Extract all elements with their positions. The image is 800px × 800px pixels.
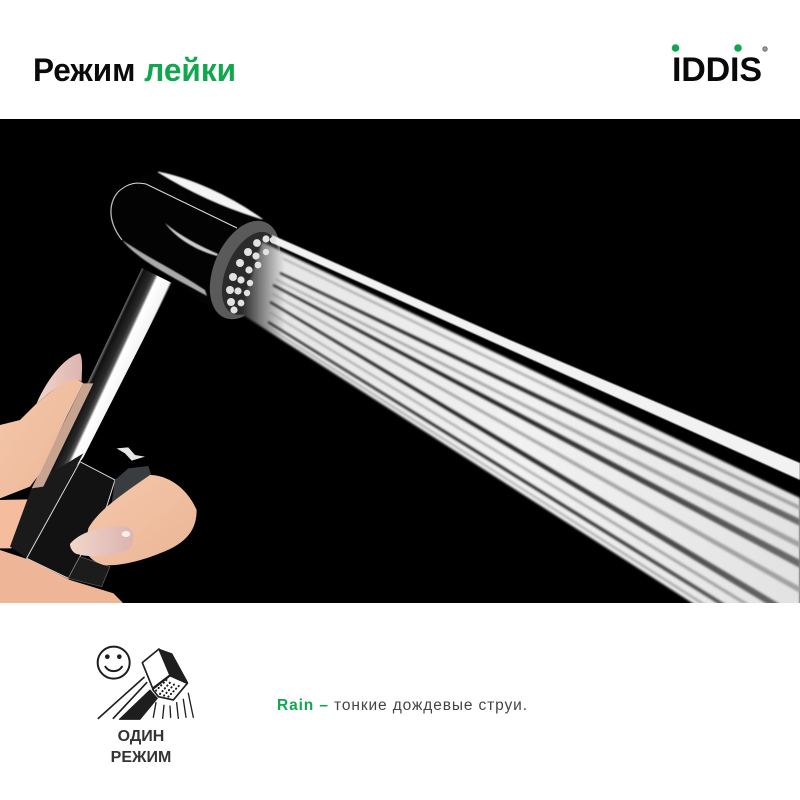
icon: one mode shower head with smile	[98, 647, 193, 719]
shower head face	[210, 220, 280, 320]
palm	[0, 499, 28, 548]
chrome block	[27, 462, 115, 578]
skin reflection on chrome	[32, 383, 93, 488]
block side button	[112, 466, 154, 503]
photo panel: hand holding shower head	[0, 119, 800, 603]
shower head nozzles	[226, 235, 276, 314]
thumb	[85, 475, 197, 565]
shower head body	[110, 170, 263, 296]
icon: shower head	[98, 649, 193, 719]
index finger	[0, 375, 83, 498]
icon label: ОДИН	[118, 728, 164, 745]
nail highlight	[122, 531, 130, 537]
water jets	[241, 234, 800, 603]
logo: IDDIS: IDDIS	[672, 51, 762, 89]
top latch	[117, 447, 145, 461]
icon: smiley	[98, 647, 130, 679]
thumb nail	[70, 526, 133, 556]
title: Режим лейки	[33, 52, 236, 88]
handle lower section	[10, 453, 83, 558]
icon label second line: РЕЖИМ	[111, 749, 171, 766]
index nail	[37, 353, 82, 403]
chrome handle stem	[50, 268, 172, 473]
caption: Rain – тонкие дождевые струи.	[277, 697, 527, 714]
fingers lower	[0, 550, 125, 605]
hand and handle base	[0, 353, 197, 605]
lower collar	[68, 557, 110, 587]
